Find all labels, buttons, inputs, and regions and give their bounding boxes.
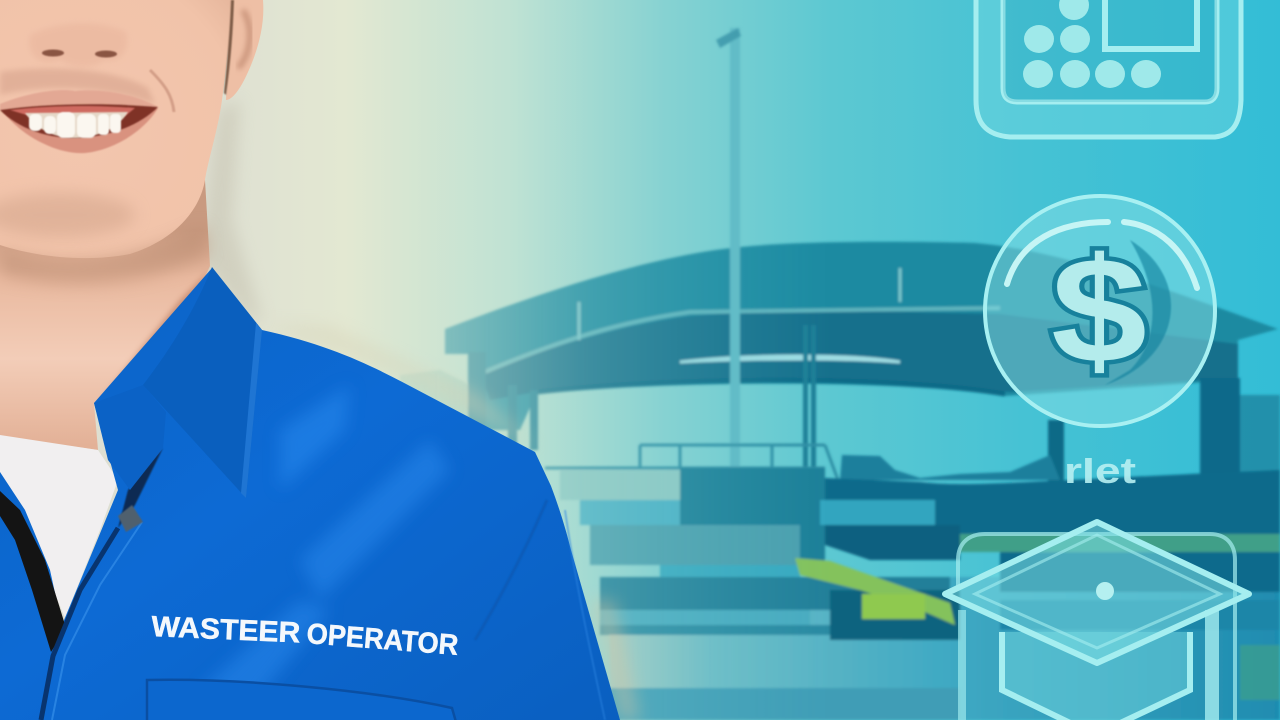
- lower canopy beam: [536, 380, 1005, 394]
- dollar sign: $: [1051, 227, 1147, 394]
- white t-shirt: [0, 435, 118, 618]
- smile fold: [150, 70, 174, 112]
- coin disc: [985, 196, 1215, 426]
- coin arc highlight: [1007, 222, 1108, 284]
- mortarboard: [945, 522, 1249, 663]
- calculator display: [1105, 0, 1197, 49]
- nostrils: [42, 50, 64, 56]
- canopy dark underside: [480, 311, 1238, 400]
- dark collar shadow: [118, 448, 163, 528]
- distant trees right: [840, 455, 1060, 480]
- shirt embroidery text: [151, 611, 460, 662]
- shirt embroidery text: OPERATOR: [305, 618, 460, 662]
- light pole and lamp: [730, 28, 740, 468]
- mouth interior: [0, 104, 158, 138]
- zipper pull: [118, 505, 143, 532]
- railing: [545, 445, 825, 468]
- teeth: [25, 112, 128, 138]
- shirt body: [0, 268, 620, 720]
- faint facility sign: rIet: [1064, 450, 1136, 491]
- shirt lighter folds: [200, 385, 450, 720]
- ear: [226, 0, 263, 100]
- neck collar shadow: [100, 270, 210, 402]
- icon: graduation cap: [945, 522, 1249, 720]
- ground and water: [610, 577, 1280, 720]
- lower lip: [2, 108, 158, 153]
- zipper line: [41, 528, 118, 720]
- cap button: [1096, 582, 1114, 600]
- cap body: [1002, 632, 1190, 720]
- icon: calculator: [976, 0, 1241, 137]
- dark zipper tape: [0, 491, 66, 652]
- stubble: [0, 193, 135, 237]
- mouth: [0, 90, 158, 153]
- icon: dollar coin: [985, 196, 1215, 426]
- wastewater treatment facility: [400, 28, 1280, 720]
- sideburn: [224, 0, 234, 95]
- canopy light beam: [480, 308, 1000, 374]
- gum: [10, 106, 135, 116]
- shadow under nose: [0, 69, 155, 104]
- shoulder seam: [475, 500, 547, 640]
- collar left flap: [94, 385, 166, 490]
- soft halo behind person: [200, 100, 262, 320]
- distant trees left: [400, 370, 466, 416]
- lower deck: [825, 470, 1280, 540]
- canopy struts: [579, 268, 900, 340]
- green walkway: [795, 558, 955, 625]
- shirt embroidery text: WASTEER: [151, 611, 301, 649]
- canopy roof: [445, 242, 1278, 430]
- upper lip: [0, 90, 158, 110]
- cap back frame: [958, 534, 1235, 720]
- calculator keys: [1023, 0, 1161, 88]
- collar: [143, 267, 262, 498]
- pocket: [147, 680, 456, 720]
- face: [0, 0, 232, 258]
- lower sleeve glow: [590, 600, 640, 720]
- neck: [0, 180, 210, 450]
- coin shadow crescent: [1105, 240, 1171, 385]
- canopy inner highlight: [680, 356, 900, 362]
- nose shading: [29, 23, 127, 67]
- shoulder glow: [262, 325, 540, 450]
- calculator outer body: [976, 0, 1241, 137]
- chin shadow: [0, 225, 208, 285]
- person: [0, 0, 620, 720]
- canopy columns: [468, 352, 486, 427]
